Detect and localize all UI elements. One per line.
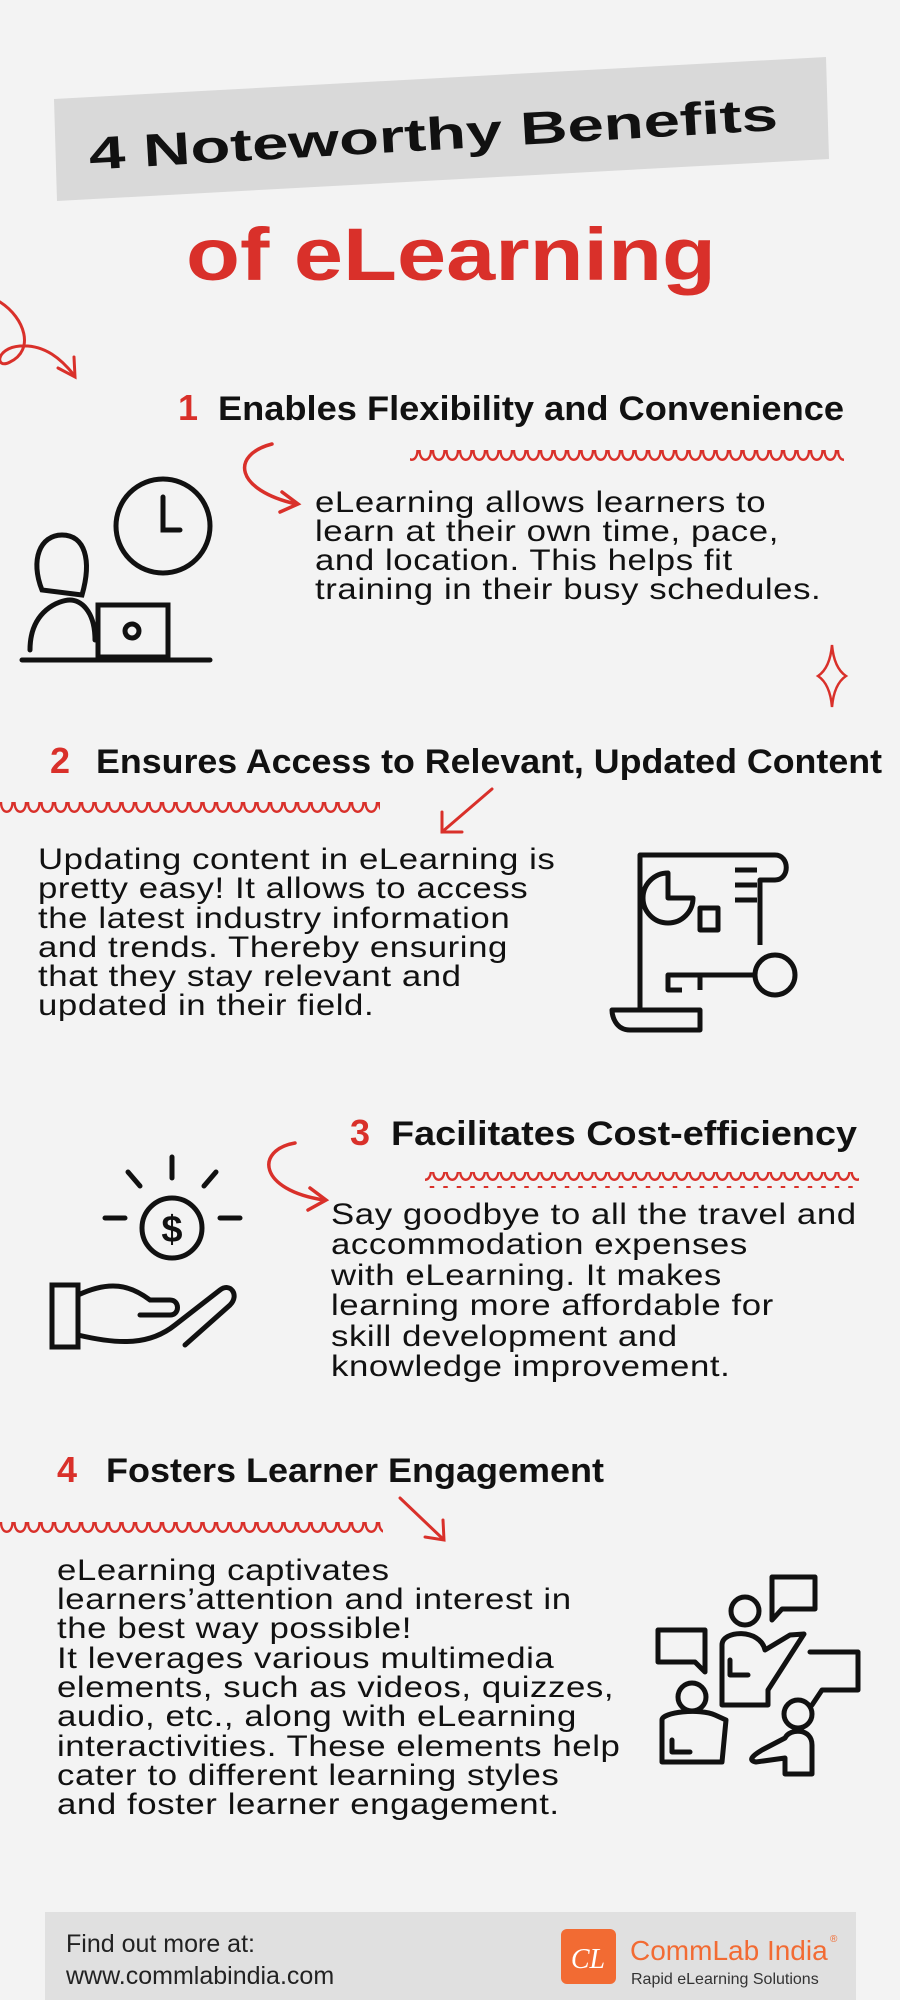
text block 2: pretty easy! It allows to access (38, 871, 528, 904)
footer text: www.commlabindia.com (65, 1962, 334, 1990)
footer text: Find out more at: (66, 1930, 255, 1958)
icon: sparkle (818, 645, 846, 707)
title line 2: of eLearning (186, 213, 716, 296)
text block 3: learning more affordable for (331, 1288, 774, 1321)
logo: CommLab India (630, 1935, 828, 1966)
icon: hand with coin: $ (161, 1209, 183, 1251)
icon: hand with coin (52, 1157, 240, 1347)
icon: document with key (612, 855, 795, 1030)
text block 4: audio, etc., along with eLearning (57, 1699, 577, 1732)
text block 4: elements, such as videos, quizzes, (57, 1670, 614, 1703)
text block 2: Updating content in eLearning is (38, 842, 555, 875)
text block 4: eLearning captivates (57, 1553, 390, 1586)
text block 3: skill development and (331, 1319, 678, 1352)
footer (45, 1912, 856, 2000)
section 4 heading: 4 (57, 1449, 77, 1490)
section 4 heading: Fosters Learner Engagement (106, 1452, 604, 1490)
text block 4: learners’attention and interest in (57, 1582, 572, 1615)
logo: ® (830, 1934, 838, 1945)
title line 1: 4 Noteworthy Benefits (87, 88, 779, 180)
arrow 4 (400, 1498, 444, 1540)
title banner (54, 57, 829, 201)
arrow 2 (442, 789, 492, 832)
text block 1: training in their busy schedules. (315, 572, 821, 605)
text block 4: cater to different learning styles (57, 1758, 559, 1791)
arrow: decorative curl (0, 302, 75, 377)
text block 2: the latest industry information (38, 901, 510, 934)
text block 4: interactivities. These elements help (57, 1729, 620, 1762)
section 3 heading: 3 (350, 1112, 370, 1153)
arrow 3 (269, 1143, 326, 1210)
text block 3: accommodation expenses (331, 1227, 748, 1260)
section 1 heading: Enables Flexibility and Convenience (218, 390, 844, 428)
text block 3: knowledge improvement. (331, 1349, 730, 1382)
section 3 heading: Facilitates Cost-efficiency (391, 1115, 857, 1153)
text block 4: and foster learner engagement. (57, 1787, 560, 1820)
text block 4: the best way possible! (57, 1611, 412, 1644)
text block 1: learn at their own time, pace, (315, 514, 779, 547)
text block 2: that they stay relevant and (38, 959, 462, 992)
icon: woman with clock and laptop (22, 479, 210, 660)
logo: Rapid eLearning Solutions (631, 1971, 819, 1988)
logo (561, 1929, 838, 1988)
text block 3: with eLearning. It makes (330, 1258, 722, 1291)
text block 4: It leverages various multimedia (57, 1641, 555, 1674)
arrow 1 (245, 444, 298, 512)
section 2 heading: 2 (50, 740, 70, 781)
section 2 heading: Ensures Access to Relevant, Updated Content (96, 743, 882, 781)
text block 2: and trends. Thereby ensuring (38, 930, 508, 963)
text block 1: and location. This helps fit (315, 543, 733, 576)
icon: group discussion (658, 1577, 858, 1774)
text block 2: updated in their field. (38, 988, 374, 1021)
section 1 heading: 1 (178, 387, 198, 428)
text block 3: Say goodbye to all the travel and (331, 1197, 857, 1230)
text block 1: eLearning allows learners to (315, 485, 766, 518)
logo: CL (571, 1944, 605, 1975)
